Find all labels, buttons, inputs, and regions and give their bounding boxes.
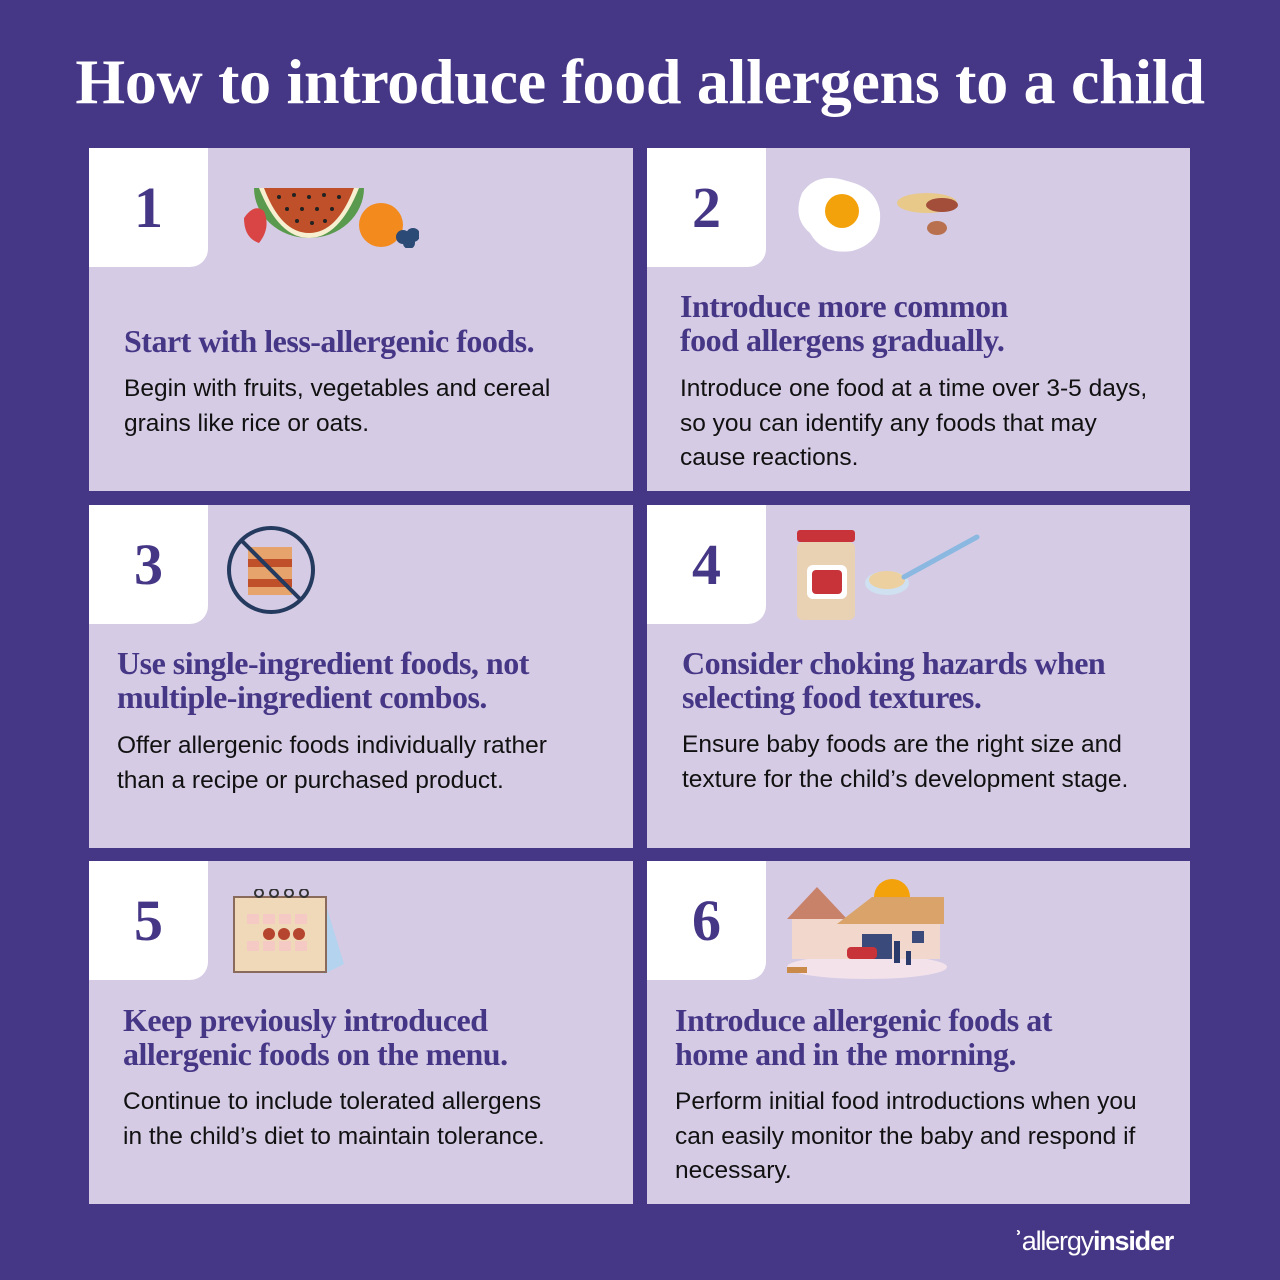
- number 2: [647, 148, 766, 267]
- heading 4: [682, 645, 1106, 715]
- body 1: Begin with fruits, vegetables and cereal: [124, 375, 550, 402]
- number 5: 5: [134, 888, 163, 953]
- heading 2: Introduce more common: [680, 288, 1008, 324]
- number 1: 1: [134, 175, 163, 240]
- heading 3: Use single-ingredient foods, not: [117, 645, 529, 681]
- body 2: [680, 375, 1147, 471]
- icon: no mixed food: [227, 526, 315, 614]
- body 5: [123, 1088, 545, 1150]
- number 3: 3: [134, 532, 163, 597]
- number 4: [647, 505, 766, 624]
- heading 4: selecting food textures.: [682, 679, 981, 715]
- body 4: texture for the child’s development stage.: [682, 766, 1128, 792]
- heading 6: Introduce allergenic foods at: [675, 1002, 1052, 1038]
- panel: step 3: [89, 505, 633, 848]
- heading 5: [123, 1002, 508, 1072]
- heading 3: multiple-ingredient combos.: [117, 679, 487, 715]
- panel: step 4: [647, 505, 1190, 848]
- heading 2: [680, 288, 1008, 358]
- heading 2: food allergens gradually.: [680, 322, 1004, 358]
- heading 3: [117, 645, 530, 715]
- icon: fruits: [244, 188, 419, 248]
- body 3: Offer allergenic foods individually rather: [117, 732, 547, 759]
- number 1: [89, 148, 208, 267]
- body 2: Introduce one food at a time over 3-5 days,: [680, 375, 1147, 402]
- panel: step 5: [89, 861, 633, 1204]
- body 5: Continue to include tolerated allergens: [123, 1088, 541, 1115]
- heading 5: Keep previously introduced: [123, 1002, 488, 1038]
- heading 6: home and in the morning.: [675, 1036, 1016, 1072]
- logo: allergyinsider: ʾallergyinsider: [1014, 1226, 1173, 1256]
- number 2: 2: [692, 175, 721, 240]
- heading 6: [675, 1002, 1052, 1072]
- body 2: cause reactions.: [680, 444, 858, 471]
- panel: step 1: [89, 148, 633, 491]
- heading 5: allergenic foods on the menu.: [123, 1036, 508, 1072]
- title: How to introduce food allergens to a child: [75, 46, 1205, 117]
- panel: step 2: [647, 148, 1190, 491]
- icon: calendar: [233, 889, 344, 974]
- number 5: [89, 861, 208, 980]
- icon: peanut butter jar and spoon: [797, 530, 980, 620]
- body 5: in the child’s diet to maintain tolerance.: [123, 1122, 545, 1150]
- icon: house with family: [787, 879, 947, 979]
- icon: egg and peanuts: [798, 178, 958, 252]
- panel: step 6: [647, 861, 1190, 1204]
- heading 1: Start with less-allergenic foods.: [124, 323, 534, 359]
- body 3: than a recipe or purchased product.: [117, 766, 504, 794]
- body 6: necessary.: [675, 1157, 792, 1184]
- number 4: 4: [692, 532, 721, 597]
- body 3: [117, 732, 547, 794]
- number 3: [89, 505, 208, 624]
- heading 4: Consider choking hazards when: [682, 645, 1105, 681]
- body 6: [675, 1088, 1137, 1184]
- number 6: 6: [692, 888, 721, 953]
- body 6: Perform initial food introductions when you: [675, 1088, 1137, 1115]
- body 1: grains like rice or oats.: [124, 410, 369, 436]
- body 4: Ensure baby foods are the right size and: [682, 731, 1122, 758]
- body 1: [124, 375, 550, 436]
- body 4: [682, 731, 1128, 792]
- body 6: can easily monitor the baby and respond if: [675, 1122, 1135, 1150]
- body 2: so you can identify any foods that may: [680, 410, 1097, 436]
- number 6: [647, 861, 766, 980]
